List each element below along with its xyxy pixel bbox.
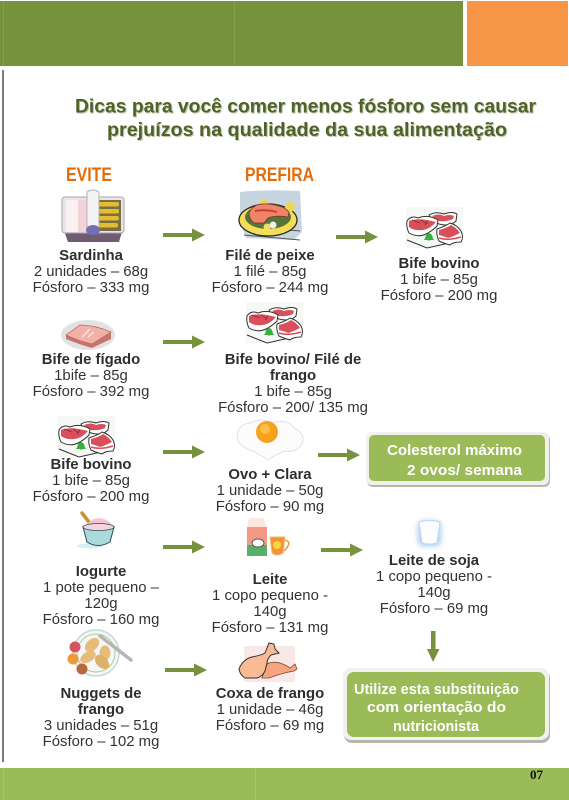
item: leite de soja: 1 copo pequeno - [376, 569, 492, 585]
item: ovo + clara [216, 467, 324, 515]
icon: meat [406, 207, 463, 248]
arrow [165, 664, 207, 676]
item: coxa de frango [216, 686, 324, 734]
icon: meat [246, 302, 303, 343]
callout: colesterol: 2 ovos/ semana [407, 462, 523, 479]
arrow [321, 544, 363, 556]
arrow [318, 448, 360, 462]
item: bife bovino: Fósforo – 200 mg [381, 288, 497, 304]
item: bife bovino: Bife bovino [50, 457, 132, 473]
item: bife bovino / file de frango: frango [270, 368, 316, 384]
icon: liver steak [61, 320, 115, 350]
item: iogurte [43, 564, 160, 628]
item: leite de soja [376, 553, 492, 617]
item: bife bovino: 1 bife – 85g [400, 272, 478, 288]
arrow [163, 336, 205, 348]
item: file de peixe: Fósforo – 244 mg [212, 280, 328, 296]
title: Dicas para você comer menos fósforo sem causar [75, 96, 536, 118]
page number: 07 [530, 767, 544, 782]
item: bife bovino: 1 bife – 85g [52, 473, 130, 489]
item: leite de soja: 140g [417, 585, 451, 601]
icon: nuggets plate [68, 630, 131, 676]
arrow [336, 230, 378, 244]
item: sardinha [33, 248, 149, 296]
icon: fried egg [237, 420, 303, 460]
item: leite de soja: Leite de soja [389, 553, 480, 569]
footer bar [0, 768, 569, 800]
callout: colesterol [366, 432, 550, 487]
title: Dicas para você comer menos fósforo sem causar [76, 96, 537, 118]
item: sardinha: Sardinha [59, 248, 124, 264]
item: iogurte: 120g [84, 596, 118, 612]
item: bife bovino / file de frango: Fósforo – 200/ 135 mg [218, 400, 368, 416]
item: leite: Fósforo – 131 mg [212, 620, 328, 636]
title: prejuízos na qualidade da sua alimentação [108, 120, 508, 142]
item: bife bovino / file de frango: Bife bovino/ Filé de [225, 352, 361, 368]
arrow [163, 446, 205, 458]
item: bife de figado: Fósforo – 392 mg [33, 384, 149, 400]
icon: sardine can [62, 190, 124, 242]
callout: substituicao: nutricionista [393, 718, 480, 735]
item: bife bovino: Fósforo – 200 mg [33, 489, 149, 505]
item: ovo + clara: Fósforo – 90 mg [216, 499, 324, 515]
icon: meat [58, 416, 115, 457]
arrow [163, 228, 205, 242]
left vertical rule [2, 70, 4, 762]
item: iogurte: Iogurte [76, 564, 126, 580]
title: prejuízos na qualidade da sua alimentação [107, 119, 507, 141]
item: nuggets de frango: Nuggets de [60, 686, 142, 702]
item: sardinha: Fósforo – 333 mg [33, 280, 149, 296]
callout: substituicao: com orientação do [367, 699, 506, 716]
item: coxa de frango: Coxa de frango [216, 686, 324, 702]
item: bife bovino [33, 457, 149, 505]
item: nuggets de frango: frango [78, 702, 124, 718]
item: coxa de frango: Fósforo – 69 mg [216, 718, 324, 734]
item: bife de figado: 1bife – 85g [54, 368, 128, 384]
item: iogurte: 1 pote pequeno – [43, 580, 160, 596]
heading: evite: EVITE [66, 165, 112, 186]
icon: glass of soy milk [418, 520, 441, 546]
item: coxa de frango: 1 unidade – 46g [217, 702, 323, 718]
icon: yogurt [77, 513, 114, 548]
item: nuggets de frango [43, 686, 159, 750]
icon: fish plate [239, 190, 302, 240]
callout: substituicao [343, 668, 550, 743]
item: file de peixe [212, 248, 328, 296]
item: nuggets de frango: Fósforo – 102 mg [43, 734, 159, 750]
item: nuggets de frango: 3 unidades – 51g [44, 718, 158, 734]
item: ovo + clara: 1 unidade – 50g [217, 483, 323, 499]
arrow: down [427, 631, 440, 662]
icon: chicken legs [239, 643, 297, 682]
item: bife de figado [33, 352, 149, 400]
item: bife bovino / file de frango: 1 bife – 85g [254, 384, 332, 400]
item: leite: Leite [253, 572, 287, 588]
item: file de peixe: Filé de peixe [225, 248, 315, 264]
item: sardinha: 2 unidades – 68g [34, 264, 148, 280]
icon: milk carton and mug [247, 518, 289, 556]
item: file de peixe: 1 filé – 85g [234, 264, 306, 280]
item: leite: 1 copo pequeno - [212, 588, 328, 604]
callout: colesterol: Colesterol máximo [387, 442, 522, 459]
item: leite [212, 572, 328, 636]
arrow [163, 540, 205, 554]
item: ovo + clara: Ovo + Clara [228, 467, 312, 483]
item: leite: 140g [253, 604, 287, 620]
callout: substituicao: Utilize esta substituição [354, 681, 519, 698]
heading: prefira: PREFIRA [245, 165, 314, 186]
item: bife bovino: Bife bovino [398, 256, 480, 272]
title [75, 96, 537, 142]
item: bife bovino [381, 256, 497, 304]
header bar: green [0, 1, 463, 66]
item: leite de soja: Fósforo – 69 mg [380, 601, 488, 617]
header bar: orange [467, 1, 568, 66]
item: bife de figado: Bife de fígado [42, 352, 140, 368]
item: iogurte: Fósforo – 160 mg [43, 612, 159, 628]
item: bife bovino / file de frango [218, 352, 368, 416]
